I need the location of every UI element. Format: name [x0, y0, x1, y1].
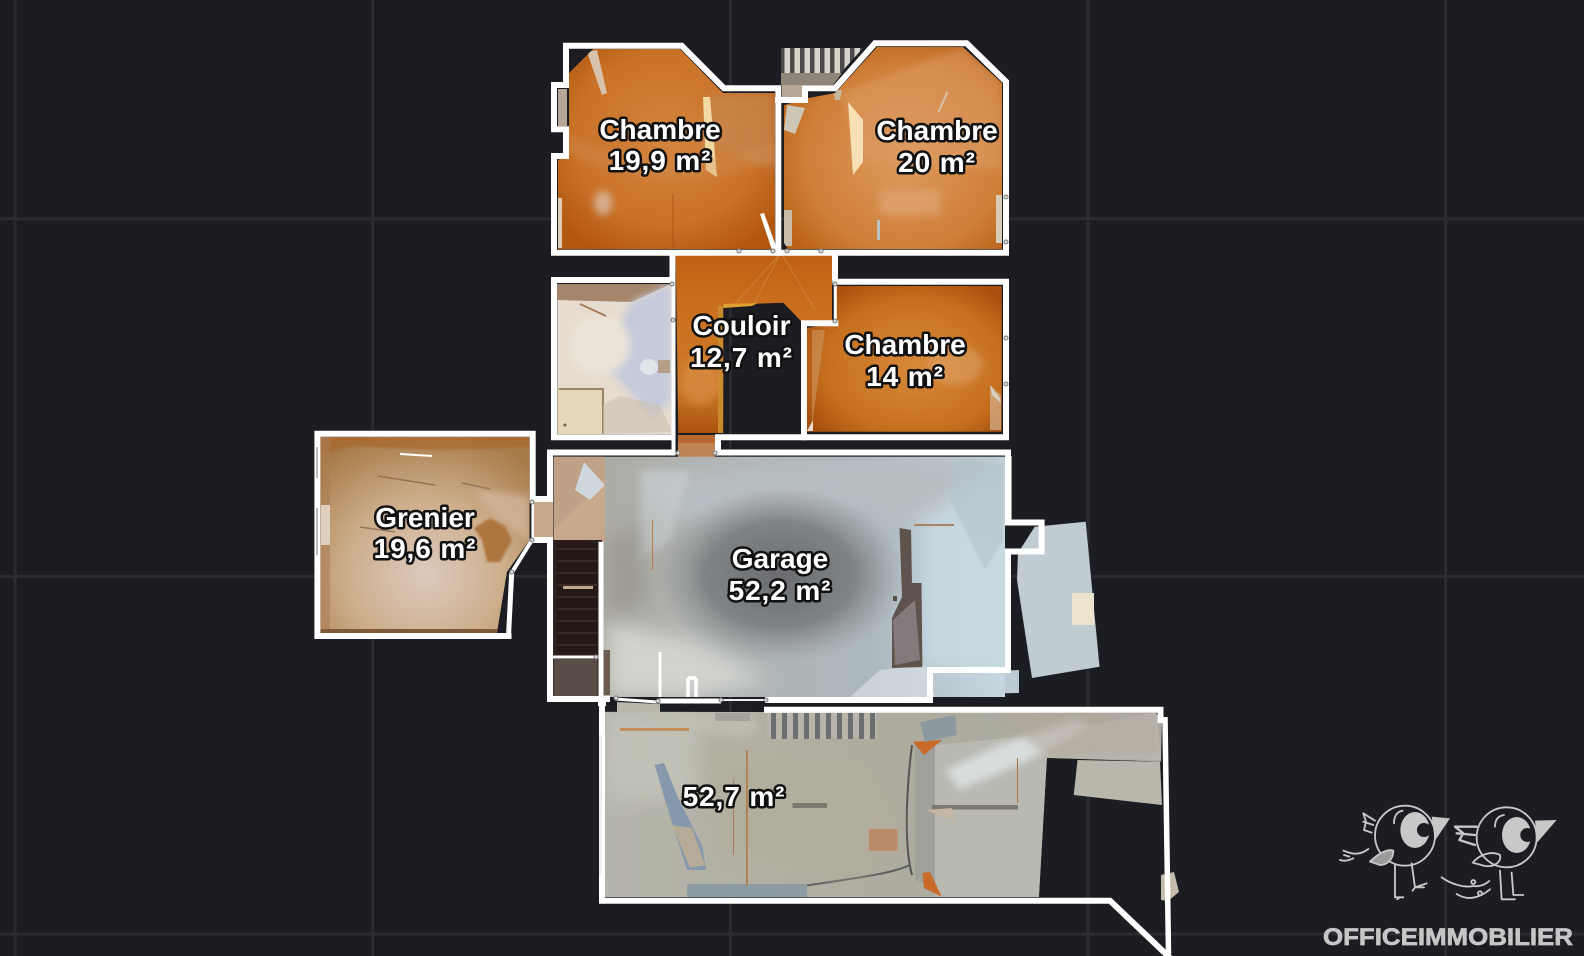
label: Couloir 12,7 m²: Couloir — [692, 310, 791, 341]
icon: bay window — [558, 89, 567, 126]
panel: passage between attic and garage — [532, 497, 553, 541]
panel: bedroom top left floor — [540, 49, 775, 249]
label: Grenier 19,6 m²: Grenier — [375, 502, 475, 533]
logo text: OFFICEIMMOBILIER — [1323, 924, 1573, 951]
label: Chambre 14 m²: 14 m² — [866, 361, 944, 392]
panel: attic floor — [320, 437, 530, 633]
label: Garage 52,2 m²: 52,2 m² — [729, 575, 831, 606]
panel: hallway floor — [676, 254, 832, 457]
icon: bright patch — [1072, 593, 1094, 625]
logo: two birds — [1340, 806, 1557, 899]
panel: stairs top right — [781, 48, 863, 99]
walls: bedroom top right — [778, 43, 1006, 253]
panel: basement floor — [605, 712, 1162, 897]
label: Couloir 12,7 m²: 12,7 m² — [690, 342, 793, 373]
wall nodes — [510, 195, 1008, 703]
label: Chambre 20 m²: 20 m² — [898, 147, 976, 178]
walls: bathroom — [554, 280, 672, 437]
label: Grenier 19,6 m²: 19,6 m² — [374, 533, 476, 564]
walls: bedroom top left — [554, 46, 778, 253]
label: Chambre 20 m²: Chambre — [876, 115, 998, 146]
walls: bedroom 14 m² inner — [804, 323, 835, 437]
walls: bedroom 14 m² — [718, 282, 1006, 437]
panel: stairs down — [553, 540, 610, 700]
panel: garage floor — [553, 456, 1006, 700]
label: Chambre 19,9 m²: 19,9 m² — [609, 145, 711, 176]
icon: blue object on floor — [655, 763, 706, 870]
panel: bedroom 14 m² floor — [807, 286, 1002, 432]
walls: attic — [317, 434, 533, 636]
walls: hallway — [672, 255, 835, 450]
icon: loose patch right — [1161, 872, 1179, 901]
label: Garage 52,2 m²: Garage — [732, 543, 828, 574]
panel: garage extension floor — [933, 670, 1019, 695]
panel: basement entry floor — [617, 702, 660, 713]
label: 52,7 m²: 52,7 m² — [683, 781, 785, 812]
walls: hallway right — [834, 280, 837, 323]
panel: stairs in basement — [768, 713, 876, 739]
label: Chambre 14 m²: Chambre — [844, 329, 966, 360]
walls: hallway thin — [672, 280, 676, 453]
icon: door swing — [760, 213, 777, 250]
label: Chambre 19,9 m²: Chambre — [599, 114, 721, 145]
panel: bedroom top right floor — [784, 47, 1002, 249]
panel: lower-right loose patch — [1017, 522, 1100, 678]
panel: basement loose patch — [1074, 760, 1162, 805]
panel: garage right strip — [1005, 456, 1012, 522]
walls: garage — [535, 452, 1042, 702]
panel: bathroom floor — [557, 284, 672, 434]
walls: basement — [598, 702, 1168, 956]
